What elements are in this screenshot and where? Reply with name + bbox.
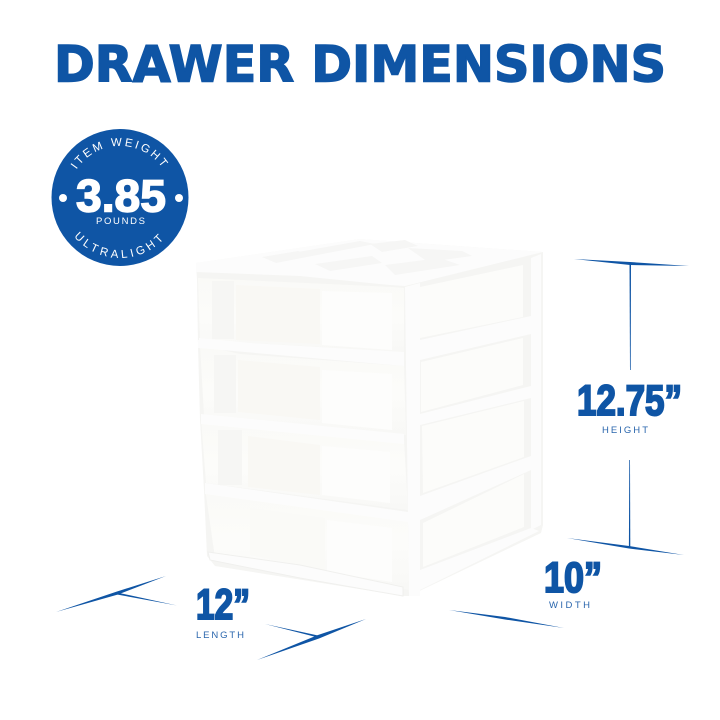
length value: 12” [196,581,250,629]
height lower line [629,460,630,547]
side windows [420,265,524,567]
dimension: width [449,554,602,628]
unit frame silhouette [196,239,543,596]
badge unit: POUNDS [96,216,145,227]
drawer 2 [199,338,406,435]
dimension: height [567,259,689,555]
height value: 12.75” [577,377,682,425]
width value: 10” [544,554,602,602]
drawer 3 [201,414,408,510]
title: DRAWER DIMENSIONS [54,36,666,94]
top tray compartments [262,240,472,275]
length left long line [56,576,166,612]
height bottom tick [567,538,684,555]
drawer 1 [198,278,404,360]
badge: item weight 3.85 pounds [52,129,188,266]
drawer 4 [205,483,409,596]
height top tick [574,259,689,266]
product: four-drawer plastic storage unit [196,239,543,596]
width label: WIDTH [549,600,590,611]
length right long line [257,619,366,660]
height label: HEIGHT [602,425,648,436]
badge arc text: ultralight: ULTRALIGHT [76,232,162,258]
top organizer tray [196,239,543,286]
side frame highlights [405,254,541,596]
length left branch [117,592,177,606]
badge left dot [59,194,67,202]
dimension: length [56,576,366,660]
badge right dot [175,194,183,202]
width line [449,610,564,628]
length right branch [265,624,318,638]
length label: LENGTH [196,630,244,641]
badge weight number: 3.85 [76,170,166,222]
badge arc text: item weight: ITEM WEIGHT [70,138,168,169]
height upper line [630,263,631,370]
